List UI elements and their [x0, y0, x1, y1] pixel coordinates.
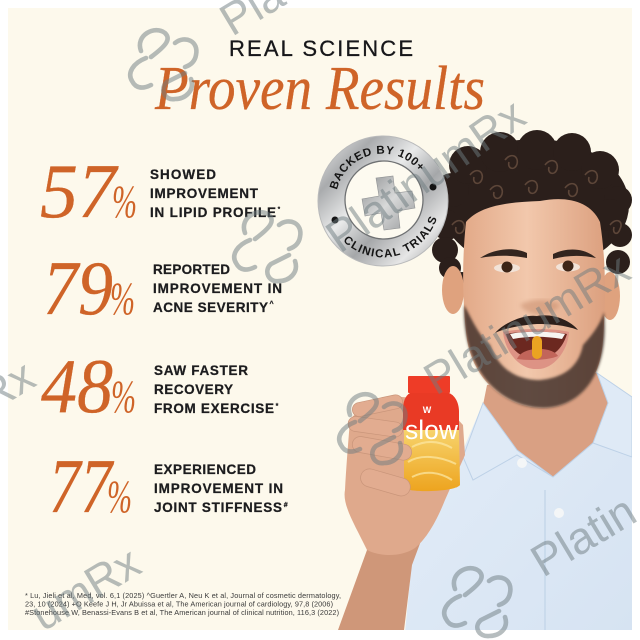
description: ^ [270, 300, 274, 308]
stat: 48 percent [41, 343, 279, 429]
brand mark: W [423, 405, 432, 415]
percent sign: % [112, 176, 137, 228]
fingers [347, 394, 413, 498]
bottle body red [403, 393, 459, 430]
bottle [403, 376, 460, 491]
description: IMPROVEMENT [150, 186, 259, 201]
description: REPORTED [153, 262, 230, 277]
watermark logo 4 [444, 568, 510, 636]
watermark logo 1 [130, 30, 196, 99]
watermark text bottom left: umRx [22, 536, 149, 640]
description: IMPROVEMENT IN [154, 481, 283, 496]
watermark logo 2 [234, 212, 300, 281]
shirt placket and buttons [517, 458, 564, 632]
footnote references: 23, 10 (2024) +O Keefe J H, Jr Abuissa et al, The American journal of cardiology, 97,8 (2006) [25, 600, 333, 608]
mouth [503, 329, 569, 369]
nose [520, 300, 560, 315]
silver ring [318, 136, 448, 266]
face [463, 199, 605, 408]
bottle capsules [404, 430, 460, 491]
shirt [405, 414, 632, 630]
silver plus [362, 176, 415, 230]
heading: proven results: Proven Results [154, 55, 485, 123]
watermark logo 3 [339, 394, 405, 463]
hair [432, 130, 632, 288]
description: FROM EXERCISE [154, 401, 274, 416]
beard [464, 305, 605, 408]
eyebrows [480, 249, 596, 259]
heading: real science: REAL SCIENCE [229, 36, 413, 61]
footnote references: * Lu, Jieli et al, Med, vol. 6,1 (2025) ^Guertler A, Neu K et al, Journal of cosmetic dermatology, [25, 591, 341, 600]
stat: 77 percent [49, 443, 288, 529]
number 79: 79 [43, 245, 113, 331]
watermark text right: PlatinumRx [415, 242, 639, 405]
description: IN LIPID PROFILE [150, 205, 276, 220]
description: RECOVERY [154, 382, 233, 397]
description: ACNE SEVERITY [153, 300, 268, 315]
shirt collar [463, 373, 632, 480]
number 77: 77 [49, 443, 115, 529]
hand [345, 397, 465, 555]
eyes [494, 260, 580, 272]
number 48: 48 [41, 343, 113, 429]
title [154, 36, 485, 123]
forearm [338, 543, 420, 630]
description: SAW FASTER [154, 363, 248, 378]
description: # [284, 502, 288, 509]
percent sign: % [110, 273, 135, 325]
moustache [495, 315, 578, 333]
watermark text middle: PlatinumRx [316, 88, 535, 262]
slow label: slow [405, 415, 458, 445]
description: IMPROVEMENT IN [153, 281, 282, 296]
bottle cap [408, 376, 450, 393]
description: SHOWED [150, 167, 216, 182]
description: EXPERIENCED [154, 462, 256, 477]
ring dots [332, 184, 436, 224]
inner circle [345, 161, 423, 239]
neck [483, 370, 608, 477]
footnote references: #Stonehouse W, Benassi-Evans B et al, The American journal of clinical nutrition, 116,3 (2022) [25, 608, 339, 617]
hair curl highlights [452, 156, 621, 233]
stat: 79 percent [43, 245, 282, 331]
percent sign: % [107, 471, 132, 523]
ears [442, 266, 620, 320]
capsule [532, 336, 542, 359]
capsule highlights [408, 442, 456, 480]
number 57: 57 [40, 148, 119, 234]
ring text top: BACKED BY 100+ [330, 146, 423, 190]
badge: backed by 100+ clinical trials [318, 136, 448, 266]
ring text bottom: CLINICAL TRIALS [344, 216, 436, 258]
percent sign: % [111, 371, 136, 423]
stat: 57 percent [40, 148, 281, 234]
description: JOINT STIFFNESS [154, 500, 282, 515]
description: * [276, 403, 279, 410]
man holding bottle [338, 130, 632, 632]
description: * [278, 207, 281, 213]
